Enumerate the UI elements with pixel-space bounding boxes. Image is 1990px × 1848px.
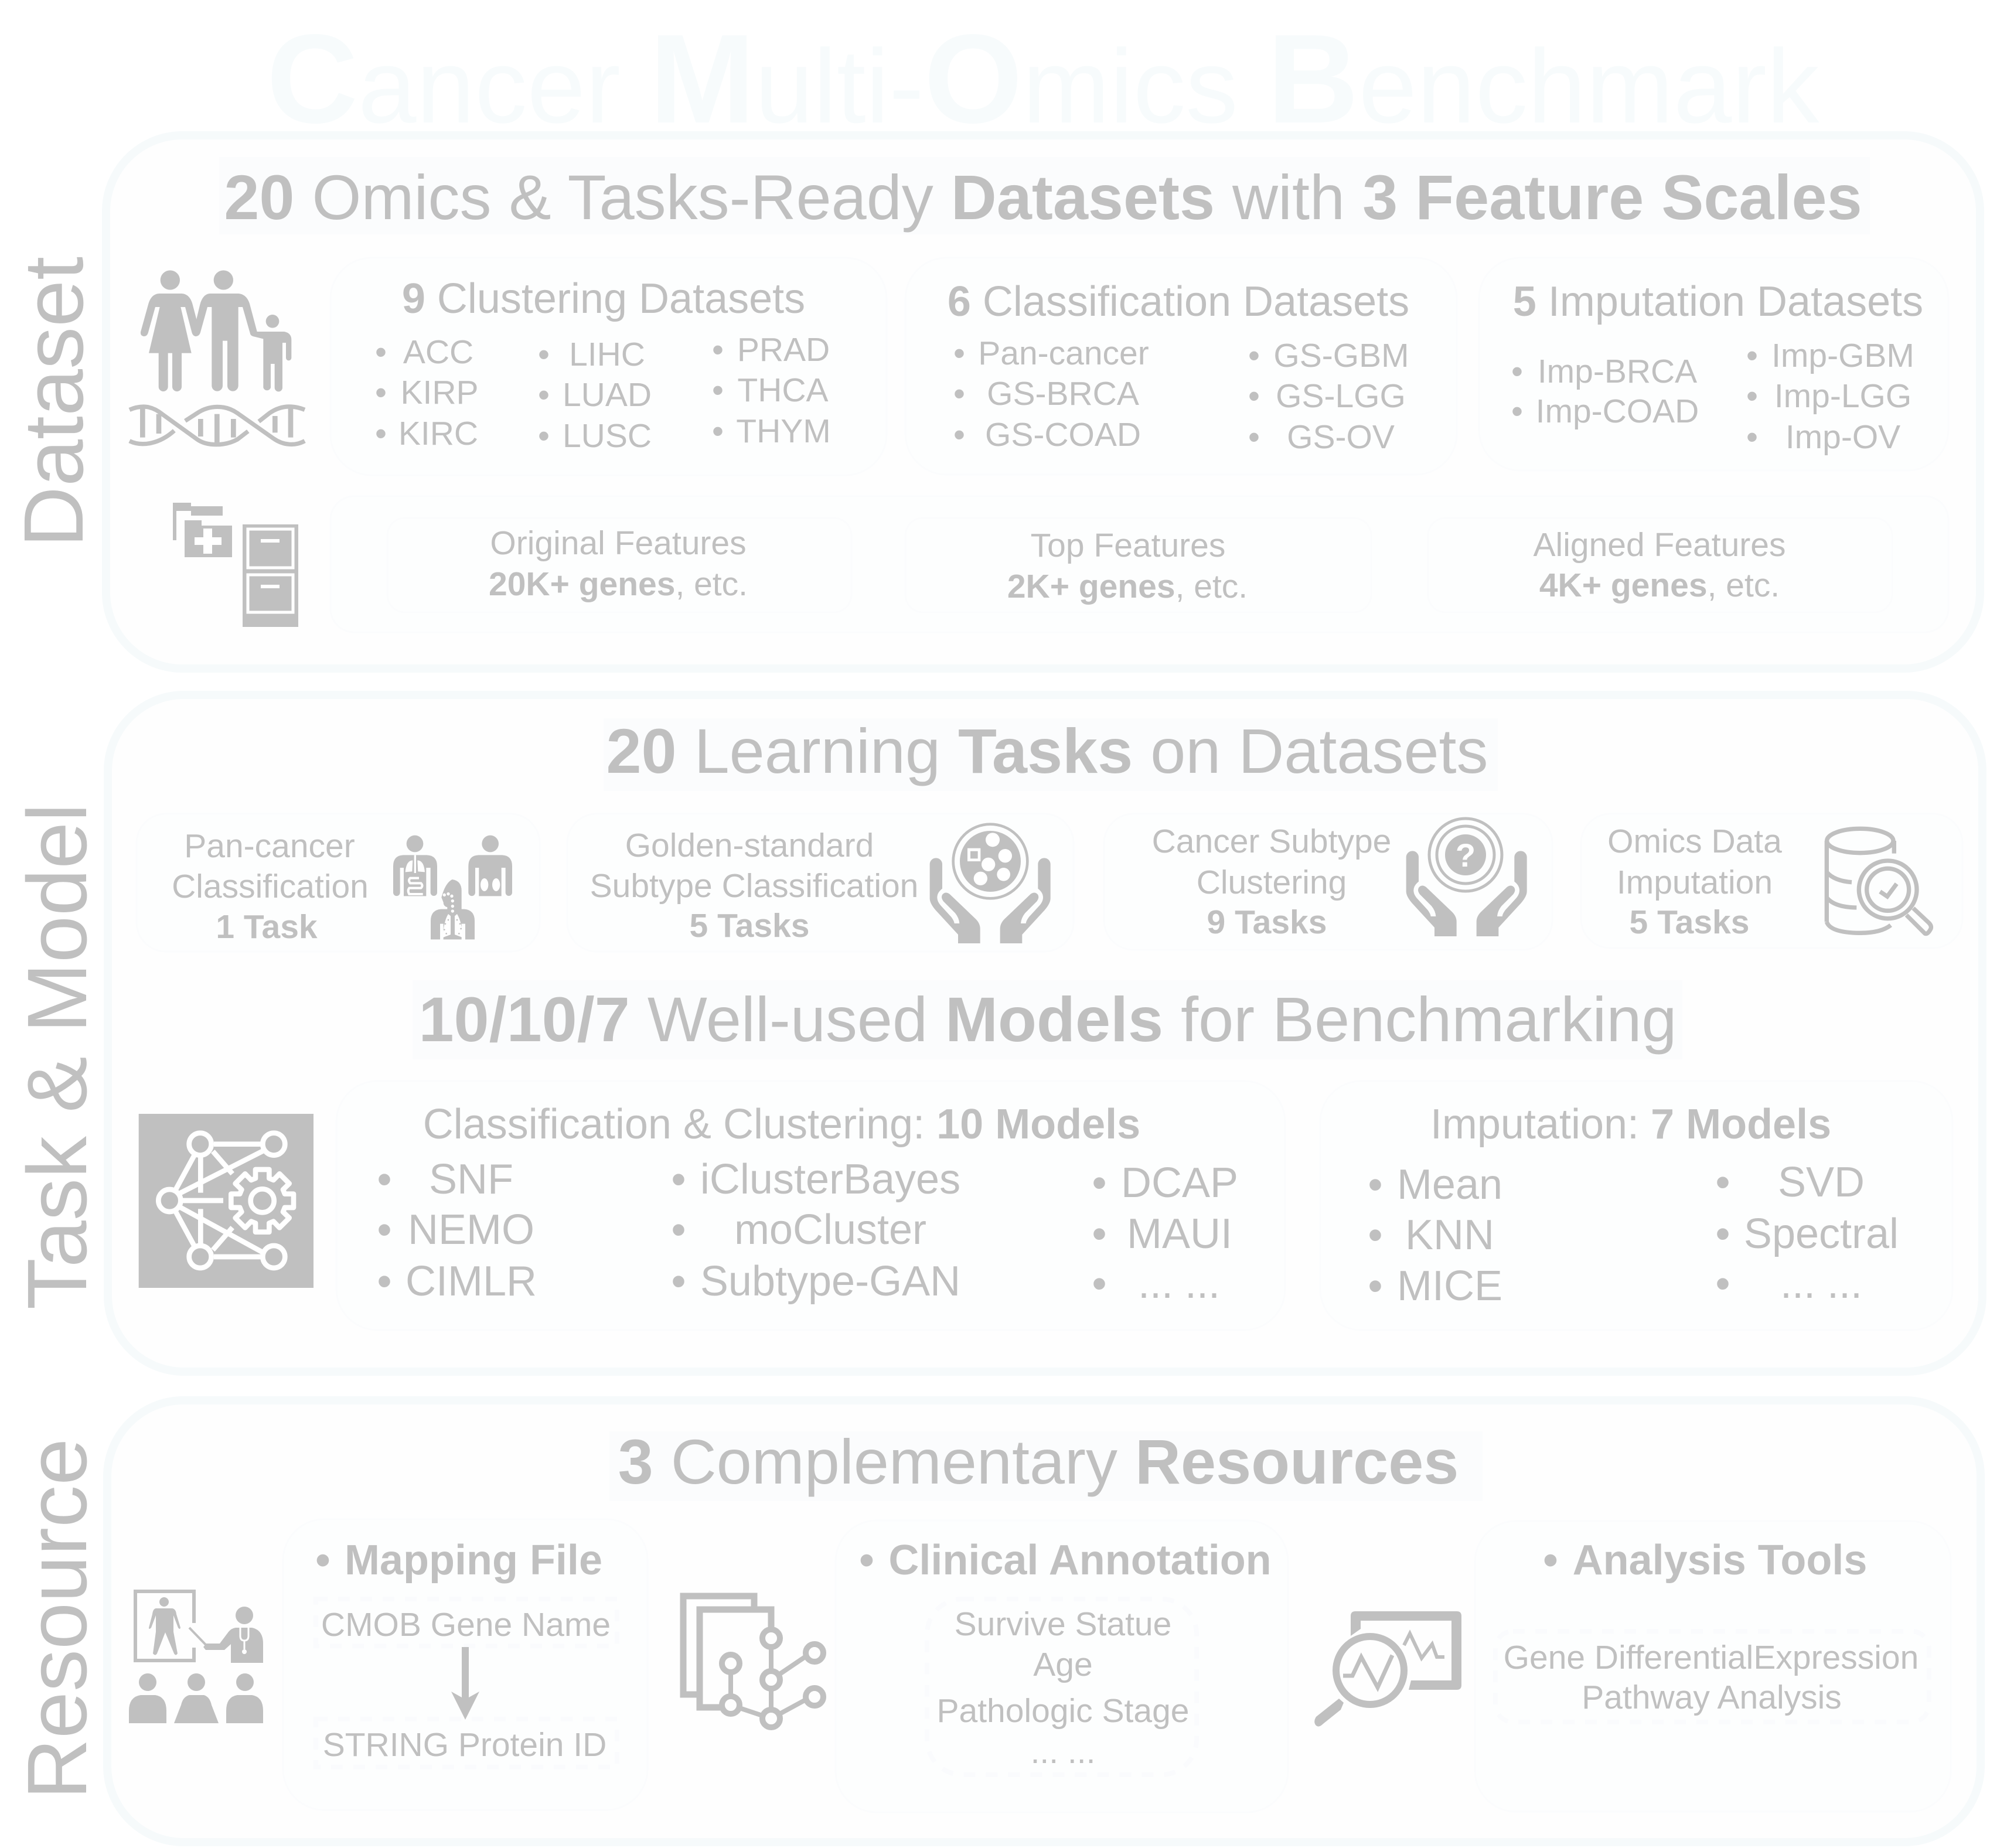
card: aligned features [1428, 518, 1892, 612]
card: omics data imputation: Imputation [1617, 864, 1773, 901]
models heading: 10/10/7 Well-used Models for Benchmarking [418, 984, 1677, 1055]
models heading highlight [413, 980, 1682, 1059]
list: clustering column 2: • [538, 336, 550, 373]
mapping file heading: • [315, 1537, 330, 1584]
dashed box: analysis list: Gene DifferentialExpression [1504, 1639, 1919, 1676]
list: imputation column 2: Imp-OV [1785, 418, 1900, 456]
classification heading: 6 Classification Datasets [948, 278, 1409, 325]
list: models column 1: • [377, 1258, 392, 1305]
list: clustering column 2 [538, 336, 652, 455]
icon: database with magnifier [1827, 828, 1931, 934]
list: imputation models column 2: • [1715, 1211, 1730, 1257]
list: classification column 1: GS-COAD [985, 416, 1141, 454]
list: models column 3: • [1092, 1260, 1107, 1307]
icon: doctor presenting to audience [129, 1591, 263, 1723]
panel: analysis tools [1475, 1521, 1951, 1812]
panel: clustering datasets [330, 258, 887, 475]
list: classification column 1: GS-BRCA [987, 375, 1139, 412]
card: pan-cancer classification: Classification [172, 868, 369, 905]
list: clustering column 1: ACC [403, 333, 473, 371]
list: clustering column 2: LUSC [563, 417, 652, 455]
list: models column 1 [377, 1156, 537, 1305]
list: clustering column 1: KIRP [400, 374, 479, 411]
list: classification column 1 [953, 335, 1149, 454]
list: models column 3 [1092, 1160, 1238, 1307]
list: classification column 1: Pan-cancer [978, 335, 1149, 372]
panel: feature scales [330, 496, 1948, 632]
list: imputation models column 1: • [1368, 1161, 1383, 1208]
card: golden-standard subtype classification [567, 814, 1074, 952]
list: clustering column 2: • [538, 417, 550, 455]
list: clustering column 3: THYM [736, 412, 831, 450]
tasks heading highlight [604, 718, 1498, 791]
list: imputation models column 1: • [1368, 1263, 1383, 1310]
icon: folders and cabinet [173, 503, 298, 627]
list: models column 3: • [1092, 1211, 1107, 1257]
list: models column 3: ... ... [1138, 1260, 1220, 1307]
card: pan-cancer classification: Pan-cancer [184, 827, 355, 865]
card: omics data imputation: Omics Data [1607, 823, 1782, 860]
card: pan-cancer classification: 1 Task [216, 908, 318, 946]
list: clustering column 3: • [712, 331, 724, 369]
list: imputation column 1: • [1511, 353, 1523, 390]
list: clustering column 2: • [538, 376, 550, 414]
dashed box: CMOB gene name: CMOB Gene Name [321, 1606, 611, 1644]
card: pan-cancer classification [137, 814, 540, 952]
card: omics data imputation [1581, 814, 1962, 948]
list: imputation column 1: • [1511, 393, 1523, 430]
list: clustering column 1: • [375, 374, 387, 411]
list: classification column 2 [1248, 337, 1409, 456]
dashed box: clinical fields: Age [1033, 1646, 1093, 1683]
list: models column 2: • [671, 1156, 686, 1203]
list: clustering column 3: THCA [737, 371, 829, 409]
card: aligned features: 4K+ genes, etc. [1539, 567, 1780, 604]
list: imputation models column 1: Mean [1397, 1161, 1502, 1208]
list: models column 2: iClusterBayes [700, 1156, 960, 1203]
icon: three body figures [393, 836, 512, 939]
panel: resource [107, 1400, 1981, 1842]
resources heading highlight [609, 1431, 1483, 1501]
list: imputation column 1 [1511, 353, 1699, 430]
list: imputation models column 2: • [1715, 1159, 1730, 1206]
side label: Task & Model: Task & Model [10, 803, 104, 1310]
list: classification column 1: • [953, 416, 965, 454]
panel: imputation models [1320, 1081, 1952, 1330]
panel: task and model [108, 695, 1982, 1372]
list: clustering column 3 [712, 331, 831, 450]
dashed box: analysis list [1495, 1631, 1929, 1722]
card: aligned features: Aligned Features [1534, 526, 1785, 564]
list: imputation column 2: Imp-LGG [1774, 377, 1911, 415]
list: models column 2: • [671, 1258, 686, 1305]
list: classification column 2: GS-LGG [1276, 377, 1406, 415]
list: imputation models column 2: ... ... [1780, 1260, 1862, 1307]
arrow: gene name to protein ID [451, 1647, 479, 1720]
panel: clinical annotation [836, 1520, 1288, 1812]
list: clustering column 1: • [375, 333, 387, 371]
tasks heading: 20 Learning Tasks on Datasets [606, 715, 1488, 786]
side label: Dataset: Dataset [6, 257, 101, 547]
list: clustering column 1: KIRC [398, 415, 478, 452]
card: top features: 2K+ genes, etc. [1007, 568, 1248, 605]
list: imputation column 1: Imp-BRCA [1538, 353, 1697, 390]
imputation models subheading: Imputation: 7 Models [1430, 1101, 1831, 1148]
heading highlight [219, 157, 1870, 234]
card: cancer subtype clustering [1104, 814, 1552, 950]
card: original features: 20K+ genes, etc. [489, 565, 748, 603]
list: clustering column 1: • [375, 415, 387, 452]
panel: dataset [106, 135, 1980, 669]
list: clustering column 1 [375, 333, 479, 452]
title: Cancer Multi-Omics Benchmark [267, 8, 1819, 149]
card: omics data imputation: 5 Tasks [1630, 903, 1749, 941]
list: classification column 2: GS-GBM [1273, 337, 1409, 374]
clinical annotation heading: • [859, 1537, 874, 1584]
card: original features: Original Features [490, 524, 747, 562]
card: top features [905, 518, 1371, 612]
list: models column 3: • [1092, 1160, 1107, 1206]
resources heading: 3 Complementary Resources [618, 1426, 1459, 1497]
list: classification column 2: • [1248, 418, 1260, 456]
card: golden-standard subtype classification: 5 Tasks [690, 907, 809, 945]
list: models column 1: • [377, 1156, 392, 1203]
list: clustering column 2: LUAD [563, 376, 652, 414]
list: clustering column 3: • [712, 412, 724, 450]
icon: hands holding question target: ? [1456, 837, 1476, 874]
imputation heading: 5 Imputation Datasets [1513, 278, 1923, 325]
list: models column 1: SNF [429, 1156, 513, 1203]
icon: network and gear [139, 1114, 314, 1288]
dataset heading: 20 Omics & Tasks-Ready Datasets with 3 Feature Scales [224, 162, 1862, 233]
list: imputation models column 1 [1368, 1161, 1502, 1310]
icon: hands holding petri dish [930, 824, 1051, 943]
list: classification column 2: GS-OV [1287, 418, 1395, 456]
list: models column 1: NEMO [408, 1206, 534, 1253]
list: models column 3: DCAP [1121, 1160, 1238, 1206]
list: clustering column 3: PRAD [737, 331, 830, 369]
dashed box: analysis list: Pathway Analysis [1582, 1679, 1842, 1716]
list: imputation models column 2 [1715, 1159, 1899, 1307]
list: imputation column 2: • [1746, 418, 1758, 456]
list: clustering column 2: LIHC [569, 336, 645, 373]
icon: hands holding question target [1406, 819, 1527, 936]
icon: documents with network nodes [683, 1596, 823, 1727]
list: models column 2: Subtype-GAN [700, 1258, 960, 1305]
list: clustering column 3: • [712, 371, 724, 409]
models subheading: Classification & Clustering: 10 Models [423, 1101, 1140, 1148]
icon: family and DNA [130, 270, 305, 445]
dashed box: clinical fields: Survive Statue [955, 1605, 1171, 1643]
list: models column 2: • [671, 1206, 686, 1253]
panel: classification and clustering models [336, 1081, 1285, 1330]
list: classification column 2: • [1248, 337, 1260, 374]
card: golden-standard subtype classification: Golden-standard [625, 827, 874, 864]
card: cancer subtype clustering: Cancer Subtype [1152, 823, 1391, 860]
list: models column 1: CIMLR [406, 1258, 537, 1305]
list: imputation models column 2: Spectral [1744, 1211, 1899, 1257]
dashed box: clinical fields [927, 1599, 1197, 1775]
list: models column 2: moCluster [734, 1206, 926, 1253]
icon: monitor with magnifier [1314, 1611, 1461, 1727]
list: classification column 1: • [953, 375, 965, 412]
card: cancer subtype clustering: 9 Tasks [1207, 903, 1327, 941]
list: imputation models column 1: KNN [1405, 1212, 1494, 1259]
list: imputation column 2 [1746, 337, 1914, 456]
card: cancer subtype clustering: Clustering [1197, 864, 1347, 901]
card: golden-standard subtype classification: Subtype Classification [590, 867, 918, 905]
list: imputation models column 2: SVD [1778, 1159, 1865, 1206]
list: imputation column 2: • [1746, 337, 1758, 374]
mapping file heading: Mapping File [345, 1537, 602, 1584]
analysis tools heading: Analysis Tools [1573, 1537, 1867, 1584]
list: imputation models column 2: • [1715, 1260, 1730, 1307]
list: models column 3: MAUI [1127, 1211, 1232, 1257]
list: classification column 1: • [953, 335, 965, 372]
panel: classification datasets [905, 258, 1457, 475]
card: original features [387, 518, 851, 612]
list: models column 2 [671, 1156, 960, 1305]
dashed box: clinical fields: Pathologic Stage [937, 1692, 1189, 1730]
dashed box: clinical fields: ... ... [1031, 1733, 1095, 1771]
clustering heading: 9 Clustering Datasets [402, 275, 805, 322]
list: models column 1: • [377, 1206, 392, 1253]
list: imputation column 1: Imp-COAD [1536, 393, 1699, 430]
side label: Resource: Resource [10, 1438, 104, 1799]
panel: imputation datasets [1479, 258, 1948, 470]
analysis tools heading: • [1543, 1537, 1558, 1584]
list: classification column 2: • [1248, 377, 1260, 415]
list: imputation models column 1: • [1368, 1212, 1383, 1259]
list: imputation column 2: Imp-GBM [1771, 337, 1914, 374]
panel: mapping file [283, 1519, 648, 1810]
list: imputation column 2: • [1746, 377, 1758, 415]
card: top features: Top Features [1031, 527, 1225, 564]
dashed box: STRING protein ID: STRING Protein ID [323, 1726, 606, 1764]
list: imputation models column 1: MICE [1397, 1263, 1502, 1310]
clinical annotation heading: Clinical Annotation [888, 1537, 1272, 1584]
